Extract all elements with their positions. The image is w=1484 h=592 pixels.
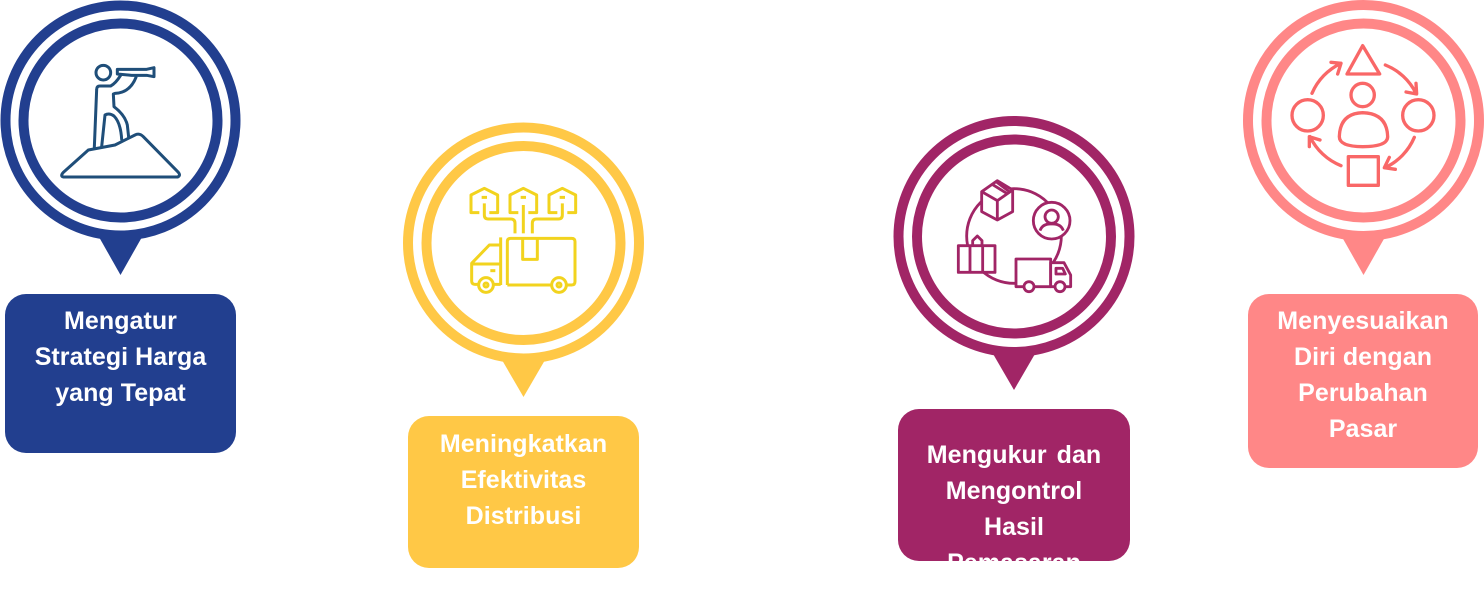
icon: delivery truck to three houses <box>471 188 576 292</box>
text box: Meningkatkan Efektivitas Distribusi <box>408 416 639 568</box>
pin: navy <box>6 6 236 275</box>
text box: Menyesuaikan Diri dengan Perubahan Pasar: Diri dengan <box>1294 343 1432 371</box>
text box: Meningkatkan Efektivitas Distribusi: Distribusi <box>466 502 581 530</box>
text box: Mengukur dan Mengontrol Hasil Pemasaran: Mengukur dan <box>927 441 1101 469</box>
text box: Mengatur Strategi Harga yang Tepat: Mengatur <box>64 307 177 335</box>
icon: logistics cycle <box>958 181 1071 292</box>
text box: Mengukur dan Mengontrol Hasil Pemasaran: Mengontrol <box>946 477 1082 505</box>
text box: Menyesuaikan Diri dengan Perubahan Pasar: Pasar <box>1329 415 1397 443</box>
text box: Mengatur Strategi Harga yang Tepat: Strategi Harga <box>35 343 206 371</box>
text box: Meningkatkan Efektivitas Distribusi: Meningkatkan <box>440 430 607 458</box>
text box: Meningkatkan Efektivitas Distribusi: Efektivitas <box>461 466 586 494</box>
pin: yellow <box>408 128 639 397</box>
text box: Mengatur Strategi Harga yang Tepat: yang Tepat <box>55 379 186 407</box>
pin: coral <box>1248 5 1479 275</box>
text box: Menyesuaikan Diri dengan Perubahan Pasar: Perubahan <box>1298 379 1428 407</box>
icon: people and shapes cycle <box>1292 46 1434 185</box>
icon: person with telescope on mountain <box>62 65 180 177</box>
text box: Menyesuaikan Diri dengan Perubahan Pasar <box>1248 294 1478 468</box>
text box: Menyesuaikan Diri dengan Perubahan Pasar: Menyesuaikan <box>1277 307 1449 335</box>
text box: Mengukur dan Mengontrol Hasil Pemasaran <box>898 409 1130 561</box>
text box: Mengatur Strategi Harga yang Tepat <box>5 294 236 453</box>
pin: purple <box>898 121 1130 390</box>
text box: Mengukur dan Mengontrol Hasil Pemasaran: Hasil <box>984 513 1044 541</box>
